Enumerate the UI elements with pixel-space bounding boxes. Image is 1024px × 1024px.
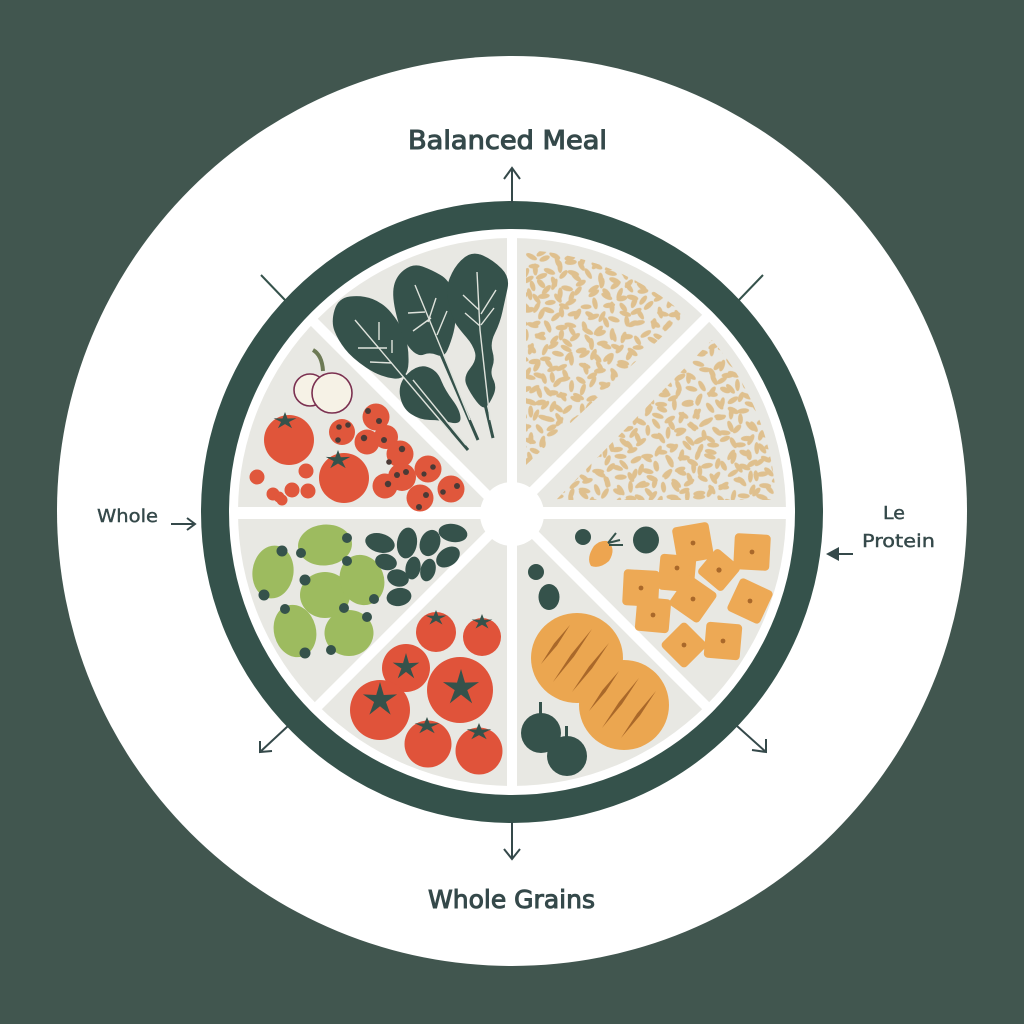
arrow: protein label [826, 547, 853, 561]
label: whole: Whole [97, 506, 158, 527]
label: lean protein: Protein [862, 531, 935, 552]
spotted cherry tomatoes [329, 404, 464, 512]
small red berries [250, 464, 316, 506]
arrow: lower right [737, 726, 766, 752]
dark beans [363, 522, 469, 608]
tofu squares [622, 522, 774, 669]
icon: red onion [294, 350, 352, 413]
label: whole grains: Whole Grains [428, 885, 595, 914]
large tomatoes [264, 412, 369, 503]
tick: upper left [261, 275, 285, 300]
arrow: whole label [171, 518, 195, 530]
dark berries top [528, 564, 560, 610]
section: tomatoes [350, 610, 502, 774]
leaf right [447, 254, 508, 438]
leaf middle [393, 265, 478, 440]
dark plums [521, 702, 587, 776]
label: lean protein: Le [883, 503, 905, 524]
section: tomatoes and onion [250, 350, 464, 512]
arrow: lower left [260, 726, 288, 752]
green olives [249, 522, 391, 662]
section: grilled patties and berries [521, 564, 669, 776]
plate ring [215, 215, 809, 809]
dots and carrot [575, 526, 659, 567]
section: rice grains right [556, 340, 776, 500]
outer white circle [57, 56, 967, 966]
section: olives and dark beans [249, 522, 469, 662]
section: leafy greens [333, 254, 508, 450]
title: Balanced Meal [408, 126, 607, 156]
plate sections with dividers [230, 230, 794, 794]
leaf left [333, 296, 468, 450]
section: rice grains upper [526, 250, 685, 465]
label: lean protein [862, 503, 935, 552]
section: tofu cubes [575, 522, 774, 669]
arrow: down to whole grains [504, 822, 520, 859]
grilled patties [531, 613, 669, 750]
arrow: up to title [504, 168, 520, 203]
tick: upper right [739, 275, 763, 300]
